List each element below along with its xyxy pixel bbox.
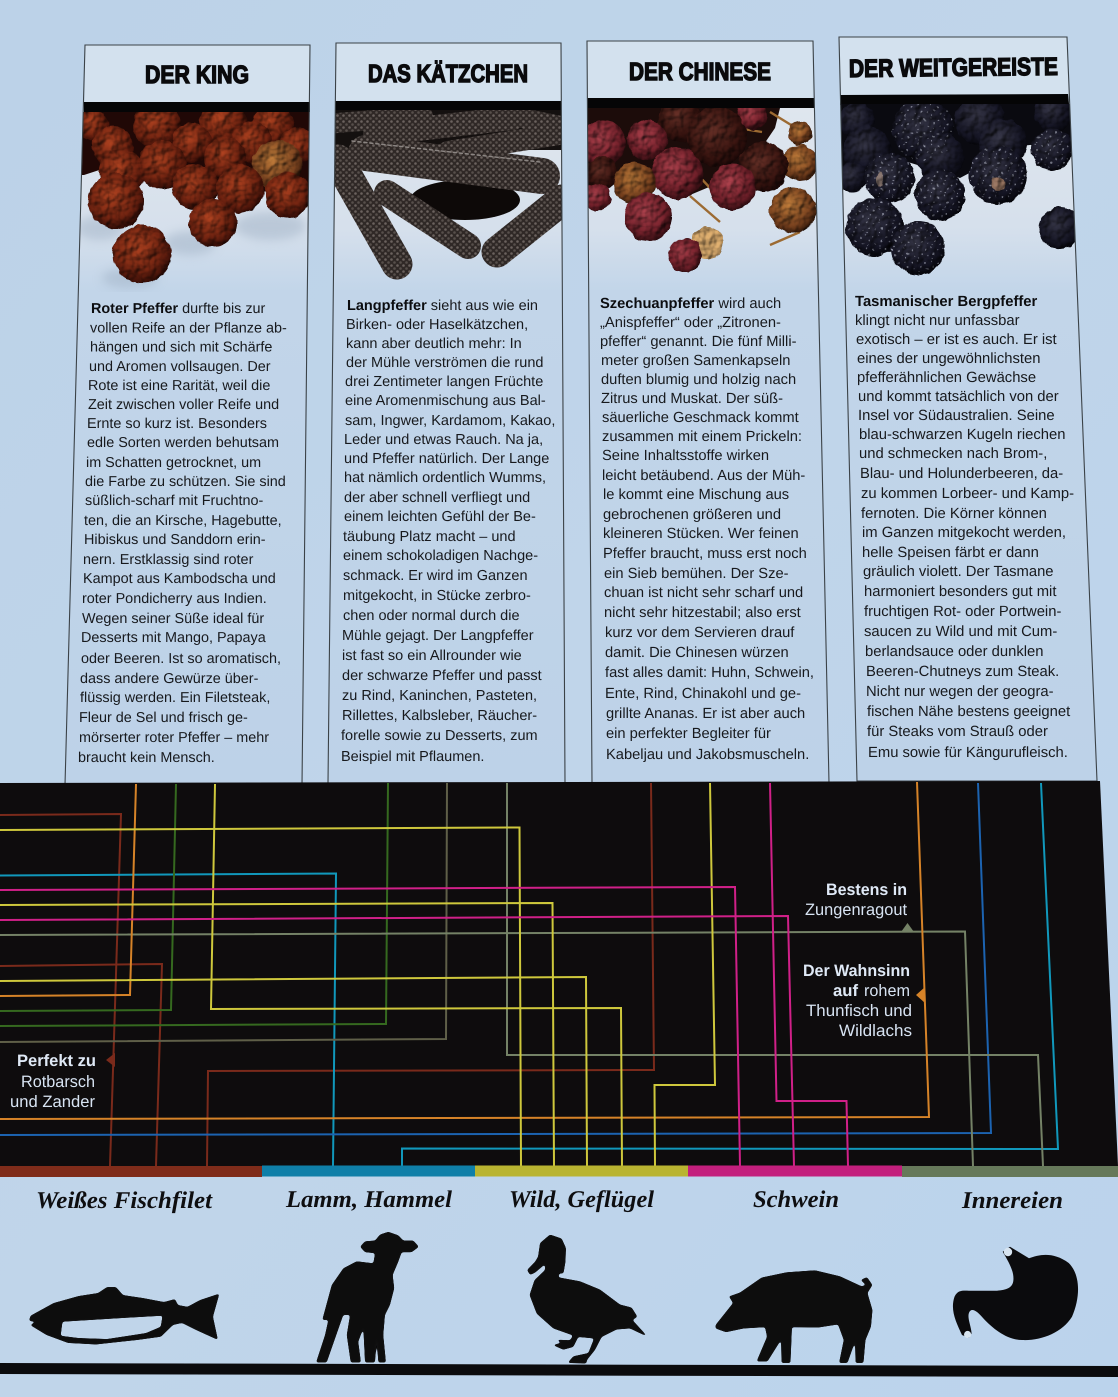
- body text: Szechuanpfeffer: säuerliche Geschmack kommt: [602, 410, 799, 426]
- body text: Roter Pfeffer: braucht kein Mensch.: [78, 750, 215, 766]
- callout: Der Wahnsinn: Thunfisch und: [806, 1002, 912, 1020]
- category: Lamm, Hammel: Lamm, Hammel: [285, 1187, 452, 1213]
- icon: pig: [716, 1270, 872, 1363]
- body text: Tasmanischer Bergpfeffer: berlandsauce oder dunklen: [865, 644, 1044, 660]
- body text: Tasmanischer Bergpfeffer: helle Speisen färbt er dann: [862, 545, 1039, 561]
- body text: Szechuanpfeffer: gebrochenen größeren und: [603, 507, 781, 523]
- body text: Langpfeffer: sam, Ingwer, Kardamom, Kakao,: [345, 413, 555, 429]
- body text: Tasmanischer Bergpfeffer: exotisch – er ist es auch. Er ist: [856, 332, 1057, 348]
- colour legend bars: [0, 1166, 1118, 1177]
- body text: Szechuanpfeffer: grillte Ananas. Er ist aber auch: [606, 706, 805, 722]
- body text: Langpfeffer: schmack. Er wird im Ganzen: [343, 568, 528, 584]
- body text: Szechuanpfeffer: ein Sieb bemühen. Der Sze-: [604, 566, 789, 582]
- heading: Das Kätzchen: DAS KÄTZCHEN: [368, 60, 528, 88]
- body text: Roter Pfeffer: Zeit zwischen voller Reife und: [88, 397, 279, 413]
- body text: Szechuanpfeffer: zusammen mit einem Prickeln:: [602, 429, 802, 445]
- body text: Langpfeffer: einem leichten Gefühl der Be-: [344, 509, 536, 525]
- heading: Der Weitgereiste: DER WEITGEREISTE: [849, 53, 1058, 83]
- body text: Roter Pfeffer: und Aromen vollsaugen. Der: [89, 359, 271, 375]
- body text: Szechuanpfeffer: Ente, Rind, Chinakohl und ge-: [605, 686, 801, 702]
- callout: Bestens in: Zungenragout: [805, 901, 907, 919]
- body text: Langpfeffer: hat nämlich ordentlich Wumms,: [344, 470, 546, 486]
- body text: Langpfeffer: eine Aromenmischung aus Bal-: [345, 393, 546, 409]
- body text: Roter Pfeffer: Roter Pfeffer durfte bis zur: [91, 301, 266, 317]
- body text: Langpfeffer: täubung Platz macht – und: [343, 529, 516, 545]
- body text: Tasmanischer Bergpfeffer: eines der ungewöhnlichsten: [857, 351, 1040, 367]
- heading: Der Chinese: DER CHINESE: [629, 58, 771, 86]
- body text: Roter Pfeffer: mörserter roter Pfeffer – mehr: [79, 730, 269, 746]
- body text: Tasmanischer Bergpfeffer: Emu sowie für Kängurufleisch.: [868, 745, 1068, 761]
- body text: Szechuanpfeffer: [600, 296, 814, 763]
- marker: Thunfisch: [916, 987, 925, 1003]
- body text: Tasmanischer Bergpfeffer: Blau- und Holunderbeeren, da-: [860, 466, 1063, 482]
- body text: Tasmanischer Bergpfeffer: [855, 294, 1074, 761]
- body text: Roter Pfeffer: Kampot aus Kambodscha und: [83, 571, 276, 587]
- body text: Langpfeffer: und Pfeffer natürlich. Der Lange: [344, 451, 549, 467]
- body text: Szechuanpfeffer: „Anispfeffer“ oder „Zitronen-: [600, 315, 781, 331]
- icon: duck: [527, 1234, 648, 1364]
- body text: Langpfeffer: Birken- oder Haselkätzchen,: [346, 317, 528, 333]
- body text: Roter Pfeffer: oder Beeren. Ist so aromatisch,: [81, 651, 281, 667]
- body text: Tasmanischer Bergpfeffer: saucen zu Wild und mit Cum-: [864, 624, 1057, 640]
- body text: Szechuanpfeffer: Pfeffer braucht, muss erst noch: [603, 546, 807, 562]
- icon: lamb: [316, 1232, 419, 1362]
- heading: Der King: DER KING: [145, 61, 249, 89]
- marker: Zungenragout: [901, 923, 914, 932]
- marker: Rotbarsch: [106, 1053, 115, 1067]
- body text: Roter Pfeffer: [78, 301, 287, 766]
- body text: Szechuanpfeffer: Seine Inhaltsstoffe wirken: [602, 448, 769, 464]
- body text: Szechuanpfeffer: chuan ist nicht sehr scharf und: [604, 585, 803, 601]
- body text: Szechuanpfeffer: ein perfekter Begleiter für: [606, 726, 771, 742]
- body text: Roter Pfeffer: Rote ist eine Rarität, weil die: [88, 378, 270, 394]
- photo: long pepper: [334, 110, 562, 280]
- category: Schwein: Schwein: [753, 1187, 839, 1213]
- body text: Langpfeffer: [341, 298, 555, 765]
- icon: fish fillet: [29, 1287, 220, 1344]
- body text: Langpfeffer: Leder und etwas Rauch. Na ja,: [344, 432, 543, 448]
- body text: Szechuanpfeffer: leicht betäubend. Aus der Müh-: [602, 468, 805, 484]
- body text: Szechuanpfeffer: nicht sehr hitzestabil; also erst: [604, 605, 801, 621]
- body text: Roter Pfeffer: dass andere Gewürze über-: [80, 671, 259, 687]
- body text: Szechuanpfeffer: kurz vor dem Servieren drauf: [605, 625, 795, 641]
- body text: Tasmanischer Bergpfeffer: pfefferähnlichen Gewächse: [857, 370, 1036, 386]
- body text: Tasmanischer Bergpfeffer: zu kommen Lorbeer- und Kamp-: [861, 486, 1074, 502]
- body text: Tasmanischer Bergpfeffer: Insel vor Südaustralien. Seine: [858, 408, 1055, 424]
- panel: Der Chinese: [580, 41, 829, 783]
- body text: Roter Pfeffer: vollen Reife an der Pflanze ab-: [90, 320, 287, 336]
- body text: Szechuanpfeffer: duften blumig und holzig nach: [601, 372, 796, 388]
- body text: Langpfeffer: mitgekocht, in Stücke zerbro-: [343, 588, 531, 604]
- icon: stomach: [953, 1247, 1078, 1340]
- body text: Langpfeffer: Beispiel mit Pflaumen.: [341, 749, 484, 765]
- body text: Szechuanpfeffer: Zitrus und Muskat. Der süß-: [601, 391, 783, 407]
- callout: Der Wahnsinn: auf: [833, 982, 859, 1000]
- body text: Tasmanischer Bergpfeffer: für Steaks vom Strauß oder: [867, 724, 1048, 740]
- body text: Roter Pfeffer: roter Pondicherry aus Indien.: [82, 591, 267, 607]
- body text: Roter Pfeffer: nern. Erstklassig sind roter: [83, 552, 254, 568]
- body text: Roter Pfeffer: süßlich-scharf mit Fruchtno-: [85, 493, 264, 509]
- callout: Bestens in: Bestens in: [826, 881, 907, 899]
- body text: Szechuanpfeffer: Kabeljau und Jakobsmuscheln.: [606, 747, 809, 763]
- body text: Szechuanpfeffer: meter großen Samenkapseln: [601, 353, 790, 369]
- callout: Der Wahnsinn: rohem: [864, 982, 910, 1000]
- body text: Roter Pfeffer: hängen und sich mit Schärfe: [90, 340, 272, 356]
- category: Weißes Fischfilet: Weißes Fischfilet: [36, 1188, 213, 1214]
- body text: Langpfeffer: der schwarze Pfeffer und passt: [342, 668, 542, 684]
- callout: Der Wahnsinn: [803, 962, 912, 1040]
- body text: Langpfeffer: drei Zentimeter langen Früchte: [345, 374, 543, 390]
- callout: Perfekt zu: und Zander: [10, 1093, 95, 1111]
- category: Innereien: Innereien: [961, 1188, 1063, 1214]
- ground line: [0, 1363, 1118, 1377]
- body text: Szechuanpfeffer: kleineren Stücken. Wer feinen: [603, 526, 799, 542]
- panel: Der King: [65, 45, 315, 785]
- body text: Langpfeffer: der Mühle verströmen die rund: [346, 355, 543, 371]
- photo: red pepper: [80, 112, 309, 289]
- heading: Der King: [85, 46, 310, 102]
- body text: Langpfeffer: kann aber deutlich mehr: In: [346, 336, 522, 352]
- body text: Roter Pfeffer: Fleur de Sel und frisch ge-: [79, 710, 248, 726]
- body text: Tasmanischer Bergpfeffer: klingt nicht nur unfassbar: [855, 313, 1020, 329]
- body text: Tasmanischer Bergpfeffer: im Ganzen mitgekocht werden,: [862, 525, 1066, 541]
- photo: Tasmanian pepper: [841, 104, 1076, 276]
- body text: Roter Pfeffer: im Schatten getrocknet, um: [86, 455, 261, 471]
- body text: Langpfeffer: einem schokoladigen Nachge-: [343, 548, 538, 564]
- heading: Der Chinese: [588, 42, 812, 98]
- body text: Tasmanischer Bergpfeffer: und schmecken nach Brom-,: [859, 446, 1047, 462]
- body text: Tasmanischer Bergpfeffer: blau-schwarzen Kugeln riechen: [859, 427, 1065, 443]
- body text: Tasmanischer Bergpfeffer: und kommt tatsächlich von der: [858, 389, 1059, 405]
- body text: Tasmanischer Bergpfeffer: fernoten. Die Körner können: [861, 506, 1047, 522]
- body text: Langpfeffer: forelle sowie zu Desserts, zum: [341, 728, 538, 744]
- body text: Roter Pfeffer: Ernte so kurz ist. Besonders: [87, 416, 267, 432]
- callout: Perfekt zu: Rotbarsch: [21, 1073, 95, 1091]
- body text: Szechuanpfeffer: fast alles damit: Huhn, Schwein,: [605, 665, 814, 681]
- body text: Roter Pfeffer: ten, die an Kirsche, Hagebutte,: [84, 513, 282, 529]
- body text: Tasmanischer Bergpfeffer: harmoniert besonders gut mit: [864, 584, 1056, 600]
- callout: Bestens in: [805, 881, 907, 919]
- line network: [0, 782, 1058, 1166]
- body text: Langpfeffer: Mühle gejagt. Der Langpfeffer: [342, 628, 534, 644]
- body text: Tasmanischer Bergpfeffer: Nicht nur wegen der geogra-: [866, 684, 1054, 700]
- body text: Tasmanischer Bergpfeffer: fruchtigen Rot- oder Portwein-: [864, 604, 1061, 620]
- body text: Tasmanischer Bergpfeffer: gräulich violett. Der Tasmane: [863, 564, 1054, 580]
- body text: Langpfeffer: zu Rind, Kaninchen, Pasteten,: [342, 688, 537, 704]
- body text: Langpfeffer: der aber schnell verfliegt und: [344, 490, 530, 506]
- body text: Roter Pfeffer: die Farbe zu schützen. Sie sind: [85, 474, 286, 490]
- body text: Tasmanischer Bergpfeffer: Beeren-Chutneys zum Steak.: [866, 664, 1059, 680]
- panel: Das Kätzchen: [325, 43, 570, 783]
- body text: Roter Pfeffer: Wegen seiner Süße ideal für: [82, 611, 264, 627]
- body text: Szechuanpfeffer: damit. Die Chinesen würzen: [605, 645, 789, 661]
- body text: Roter Pfeffer: Desserts mit Mango, Papaya: [81, 630, 266, 646]
- body text: Roter Pfeffer: edle Sorten werden behutsam: [87, 435, 279, 451]
- category: Wild, Geflügel: Wild, Geflügel: [509, 1187, 654, 1213]
- body text: Roter Pfeffer: flüssig werden. Ein Filetsteak,: [80, 690, 270, 706]
- heading: Das Kätzchen: [336, 44, 561, 100]
- body text: Tasmanischer Bergpfeffer: Tasmanischer Bergpfeffer: [855, 294, 1038, 310]
- body text: Szechuanpfeffer: pfeffer“ genannt. Die fünf Milli-: [600, 334, 797, 350]
- callout: Perfekt zu: [10, 1052, 96, 1111]
- callout: Der Wahnsinn: Der Wahnsinn: [803, 962, 910, 980]
- body text: Roter Pfeffer: Hibiskus und Sanddorn erin-: [84, 532, 266, 548]
- heading: Der Weitgereiste: [840, 38, 1069, 95]
- body text: Langpfeffer: chen oder normal durch die: [343, 608, 520, 624]
- body text: Szechuanpfeffer: Szechuanpfeffer wird auch: [600, 296, 781, 312]
- body text: Langpfeffer: ist fast so ein Allrounder wie: [342, 648, 522, 664]
- panel: pairing line chart: [0, 781, 1118, 1167]
- callout: Der Wahnsinn: Wildlachs: [839, 1022, 912, 1040]
- body text: Tasmanischer Bergpfeffer: fischen Nähe bestens geeignet: [867, 704, 1070, 720]
- panel: Der Weitgereiste: [835, 37, 1097, 781]
- callout: Perfekt zu: Perfekt zu: [17, 1052, 96, 1070]
- body text: Langpfeffer: Rillettes, Kalbsleber, Räucher-: [342, 708, 537, 724]
- body text: Langpfeffer: Langpfeffer sieht aus wie ein: [347, 298, 538, 314]
- photo: Szechuan pepper: [588, 108, 817, 272]
- body text: Szechuanpfeffer: le kommt eine Mischung aus: [603, 487, 789, 503]
